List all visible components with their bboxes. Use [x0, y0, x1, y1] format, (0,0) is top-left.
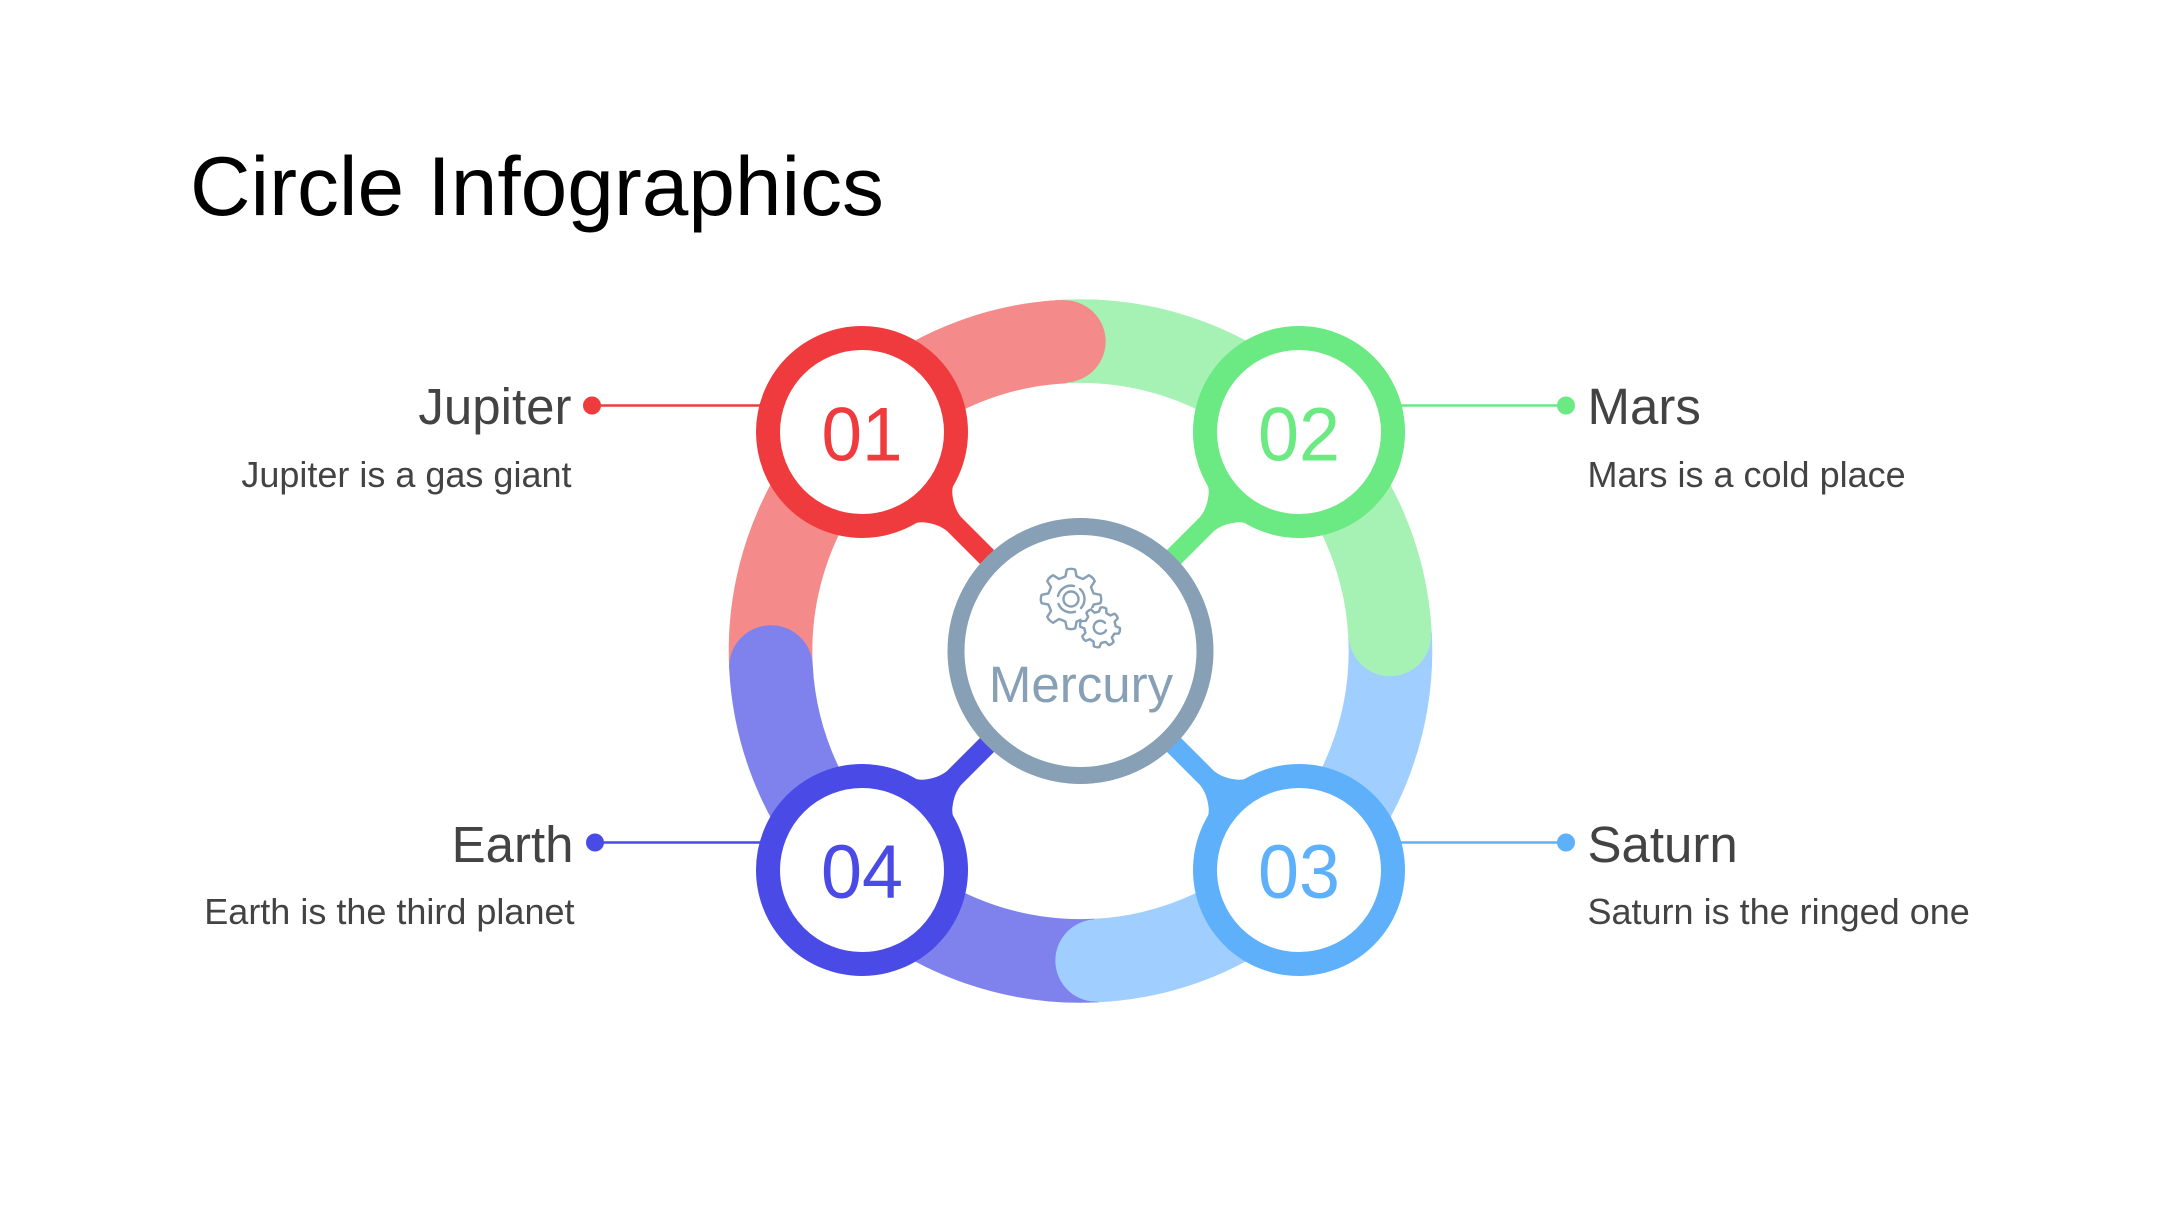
Earth leader line: [586, 834, 770, 852]
Earth heading: Earth: [452, 816, 574, 873]
Mars heading: Mars: [1588, 378, 1701, 435]
Jupiter heading: Jupiter: [418, 378, 572, 435]
Earth badge 04: 04: [821, 830, 903, 915]
panel: Mars: [1166, 338, 1906, 565]
ring segment: Mars: [1062, 300, 1432, 677]
Mars badge 02: 02: [1258, 392, 1340, 478]
Mars description: Mars is a cold place: [1588, 454, 1906, 495]
Saturn heading: Saturn: [1588, 816, 1738, 873]
hub ring: [956, 526, 1205, 776]
panel: Jupiter: [241, 338, 995, 565]
title: Circle Infographics: [190, 139, 884, 233]
Jupiter description: Jupiter is a gas giant: [241, 454, 572, 495]
icon: gears: [1041, 569, 1121, 648]
Jupiter badge 01: 01: [822, 392, 902, 478]
ring segment: Jupiter: [729, 300, 1106, 669]
hub label: Mercury: [989, 656, 1174, 713]
Saturn leader line: [1390, 834, 1575, 852]
Jupiter leader line: [583, 396, 770, 414]
Saturn badge 03: 03: [1258, 830, 1340, 915]
Saturn badge 03: [1166, 737, 1393, 964]
panel: Saturn: [1166, 737, 1970, 964]
Mars leader line: [1390, 396, 1575, 414]
Earth badge 04: [768, 737, 995, 964]
Jupiter badge 01: [768, 338, 995, 565]
Earth description: Earth is the third planet: [204, 891, 574, 932]
ring segment: Saturn: [1055, 633, 1432, 1002]
panel: Earth: [204, 737, 995, 964]
Saturn description: Saturn is the ringed one: [1588, 891, 1970, 932]
Mars badge 02: [1166, 338, 1393, 565]
ring segment: Earth: [729, 625, 1099, 1002]
panel: Mercury hub: [956, 526, 1205, 776]
